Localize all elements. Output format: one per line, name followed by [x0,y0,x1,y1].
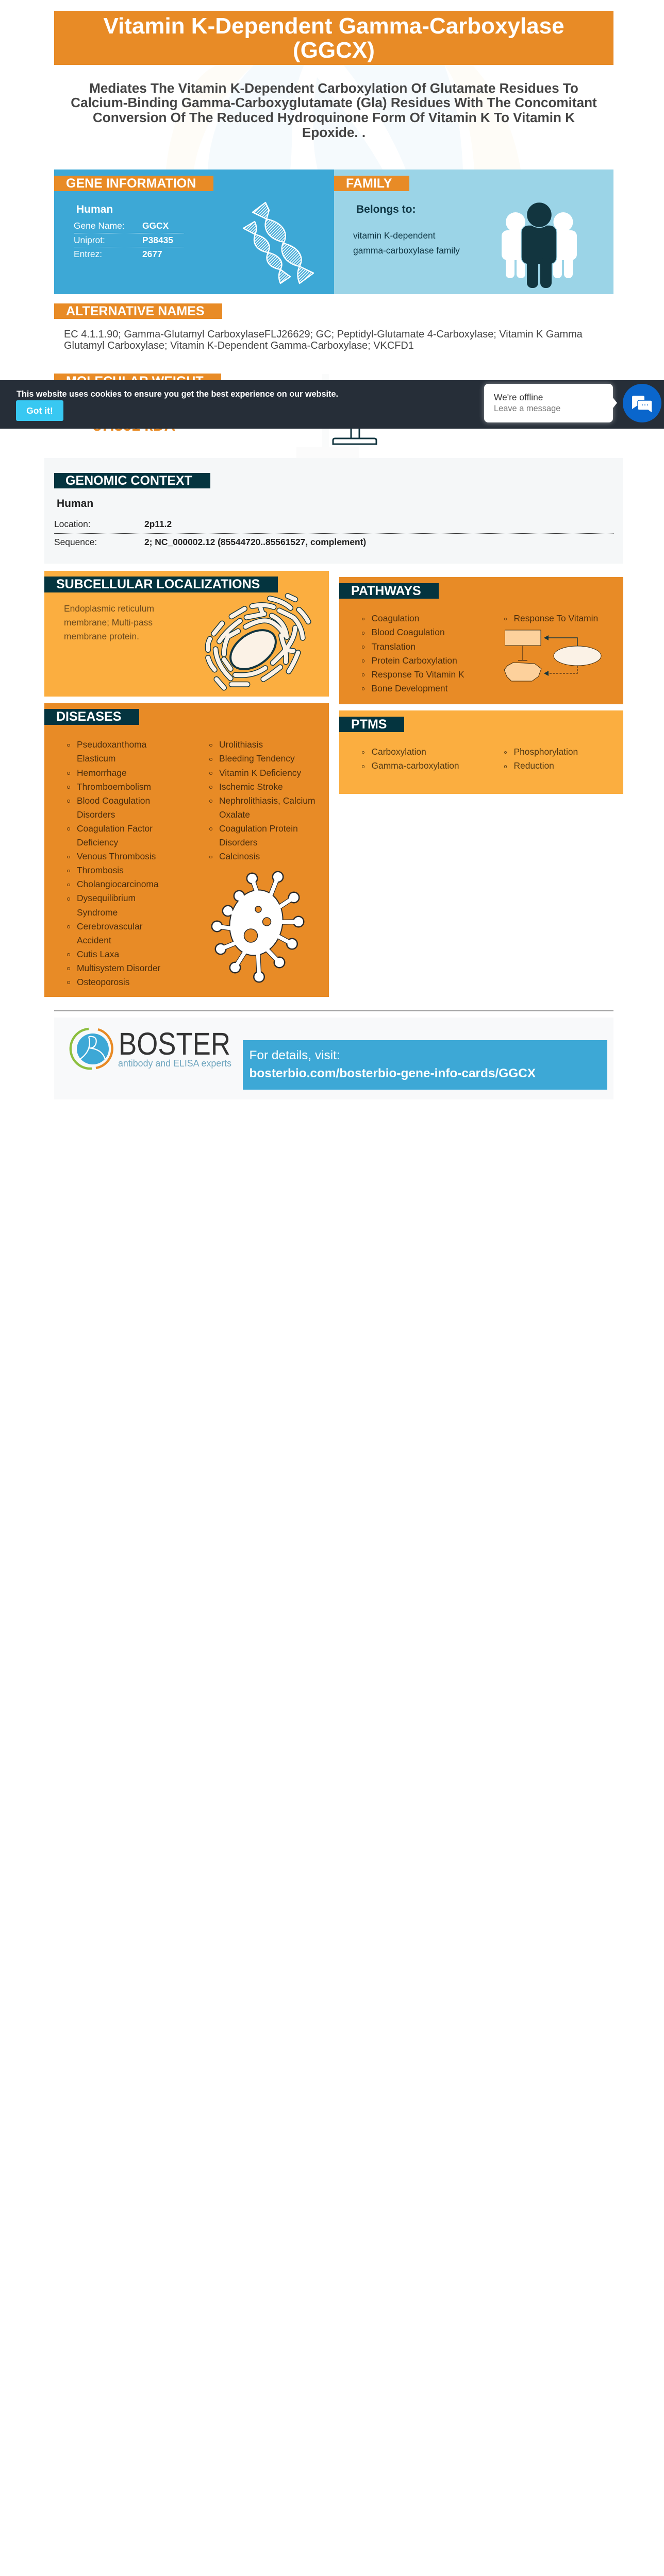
logo: Boster: antibody and ELISA experts [118,1058,231,1069]
location row: 2p11.2 [144,519,172,529]
disease list: first column: Venous Thrombosis [77,851,156,861]
icon: endoplasmic reticulum [205,593,311,690]
heading: diseases: DISEASES [56,709,121,724]
gene name row: Gene Name: [74,221,125,231]
leave a message prompt: Leave a message [494,404,560,413]
cookie message: This website uses cookies to ensure you get the best experience on our website. [16,389,338,399]
species label: Human [76,204,113,215]
offline status: We're offline [494,392,543,402]
logo: Boster [69,1026,231,1070]
title text [103,13,565,63]
pathway list: first column [362,613,464,693]
disease list: first column: Osteoporosis [77,977,129,987]
alternative names text: Glutamyl Carboxylase; Vitamin K-Dependent Gamma-Carboxylase; VKCFD1 [64,340,414,351]
heading: subcellular localizations: SUBCELLULAR LOCALIZATIONS [56,577,260,591]
heading: family: FAMILY [346,176,392,191]
entrez row: 2677 [142,249,162,259]
function summary: Conversion Of The Reduced Hydroquinone Form Of Vitamin K To Vitamin K [93,110,575,125]
pathway list: first column: Coagulation [371,613,419,623]
entrez row [74,249,162,259]
heading: pathways: PATHWAYS [351,584,421,598]
icon: DNA helices [242,202,314,284]
disease list: first column: Hemorrhage [77,768,127,778]
heading: PTMs [339,717,404,732]
function summary: Epoxide. . [302,125,366,140]
disease list: second column: Vitamin K Deficiency [219,768,301,778]
family description: gamma-carboxylase family [353,245,460,256]
icon: monitor stand [332,429,377,445]
details label: For details, visit: [250,1048,340,1062]
PTM list: first column [362,747,459,771]
disease list: first column: Blood Coagulation [77,795,150,806]
title text: Vitamin K-Dependent Gamma-Carboxylase [103,13,565,39]
pathway list: first column: Protein Carboxylation [371,655,457,666]
heading: PTMs: PTMS [351,717,387,732]
PTM list: second column: Phosphorylation [513,747,578,757]
disease list: first column: Dysequilibrium [77,893,136,903]
heading: molecular weight: MOLECULAR WEIGHT [66,374,204,388]
disease list: first column: Elasticum [77,753,115,764]
PTM list: first column: Gamma-carboxylation [371,760,459,771]
disease list: first column: Accident [77,935,111,945]
pathway list: first column: Response To Vitamin K [371,669,464,680]
localization text: membrane protein. [64,631,139,641]
function summary: Calcium-Binding Gamma-Carboxyglutamate (Gla) Residues With The Concomitant [71,95,597,110]
location row [54,519,172,529]
button: got it [16,400,63,421]
species label: Human [57,498,93,510]
disease list: first column: Syndrome [77,907,118,918]
disease list: first column: Cutis Laxa [77,949,119,959]
sequence row: Sequence: [54,537,97,547]
disease list: first column: Deficiency [77,837,118,848]
gene name row: GGCX [142,221,169,231]
heading: family [334,176,409,191]
heading: genomic context: GENOMIC CONTEXT [65,473,192,488]
PTM list: second column: Reduction [513,760,554,771]
title text: (GGCX) [293,38,375,63]
localization text [64,603,154,641]
disease list: first column: Multisystem Disorder [77,963,160,973]
disease list: second column: Bleeding Tendency [219,753,295,764]
alternative names text: EC 4.1.1.90; Gamma-Glutamyl CarboxylaseFLJ26629; GC; Peptidyl-Glutamate 4-Carboxylase; Vitamin K Gamma [64,329,583,340]
function summary: Mediates The Vitamin K-Dependent Carboxylation Of Glutamate Residues To [89,80,578,96]
disease list: first column: Cerebrovascular [77,921,143,931]
gene name row [74,221,169,231]
panel: diseases [44,703,329,997]
icon: virus [211,871,304,983]
panel: family [334,170,613,294]
disease list: second column: Calcinosis [219,851,260,861]
pathway list: first column: Bone Development [371,683,447,693]
cookie banner [0,380,664,429]
disease list: first column: Disorders [77,809,115,820]
icon: group of people [502,202,577,288]
heading: alternative names: ALTERNATIVE NAMES [66,304,205,318]
icon: chat button [623,384,661,422]
panel: genomic context [44,458,623,564]
panel: PTMs [339,710,623,794]
PTM list: second column [504,747,578,771]
location row: Location: [54,519,91,529]
PTM list: first column: Carboxylation [371,747,426,757]
heading: pathways [339,583,439,599]
disease list: second column: Nephrolithiasis, Calcium [219,795,316,806]
panel: subcellular localizations [44,571,329,697]
disease list: first column: Thrombosis [77,865,124,875]
disease list: second column: Ischemic Stroke [219,782,283,792]
icon: pathway diagram [504,630,601,681]
pathway list: first column: Blood Coagulation [371,627,445,637]
entrez row: Entrez: [74,249,102,259]
disease list: second column: Disorders [219,837,257,848]
alternative names text [64,329,583,351]
disease list: first column [67,739,160,987]
disease list: first column: Pseudoxanthoma [77,739,146,750]
disease list: second column: Coagulation Protein [219,823,298,834]
panel: gene information [54,170,334,294]
molecular weight value: 87.561 kDA [93,417,175,434]
button: got it: Got it! [26,405,53,416]
localization text: membrane; Multi-pass [64,617,153,628]
logo: Boster: BOSTER [119,1026,230,1061]
function summary [71,80,597,140]
pathway list: first column: Translation [371,641,416,652]
panel: footer [54,1018,613,1099]
sequence row: 2; NC_000002.12 (85544720..85561527, complement) [144,537,366,547]
chat popup [484,384,613,422]
disease list: second column: Urolithiasis [219,739,263,750]
belongs to label: Belongs to: [356,204,416,215]
title banner [54,11,613,65]
panel: pathways [339,577,623,704]
uniprot row [74,235,173,245]
uniprot row: P38435 [142,235,173,245]
disease list: first column: Coagulation Factor [77,823,153,834]
disease list: first column: Thromboembolism [77,782,151,792]
call to action [243,1040,607,1090]
uniprot row: Uniprot: [74,235,105,245]
details link: bosterbio.com/bosterbio-gene-info-cards/GGCX [250,1066,536,1080]
disease list: first column: Cholangiocarcinoma [77,879,159,889]
background watermark logo [208,65,463,170]
pathway list: second column: Response To Vitamin [513,613,598,623]
localization text: Endoplasmic reticulum [64,603,154,614]
heading: diseases [44,709,139,725]
disease list: second column [209,739,316,861]
heading: gene information: GENE INFORMATION [66,176,196,191]
disease list: second column: Oxalate [219,809,250,820]
family description [353,230,460,256]
family description: vitamin K-dependent [353,230,436,241]
